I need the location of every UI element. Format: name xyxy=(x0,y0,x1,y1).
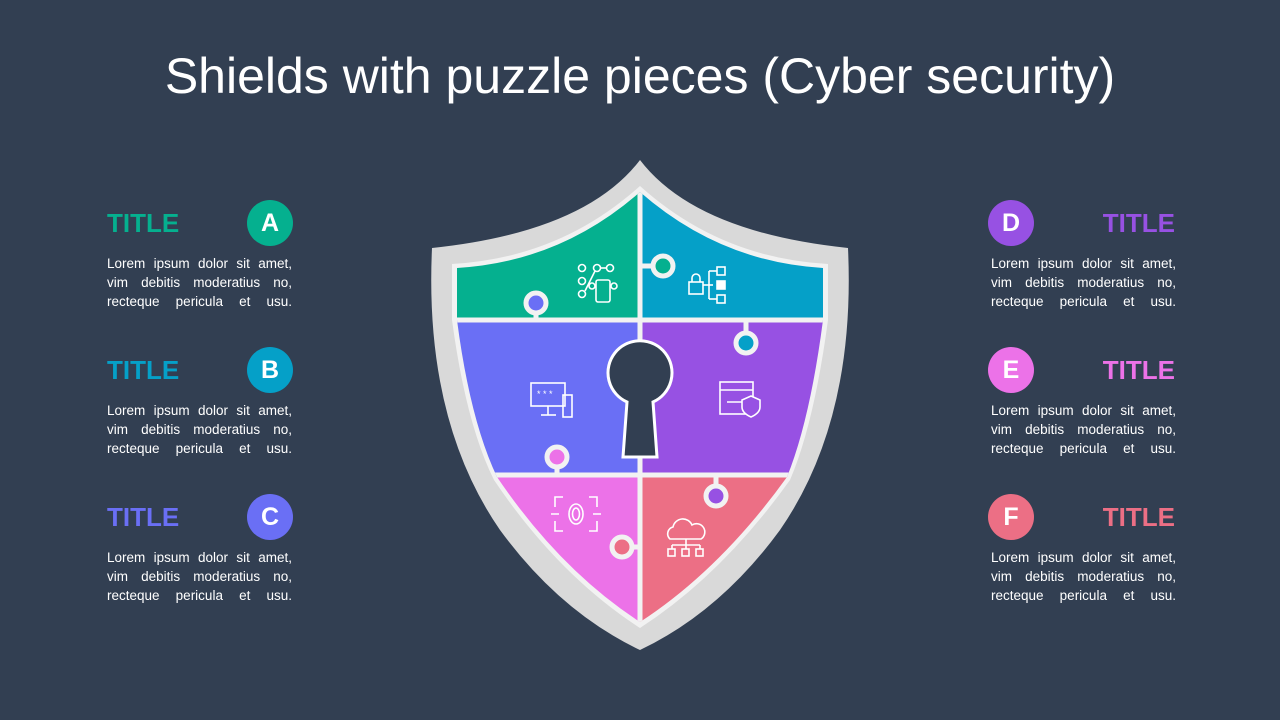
icon: network phone xyxy=(578,264,617,302)
block C: TITLE xyxy=(107,502,179,532)
block F: F xyxy=(1003,503,1019,531)
block B: Lorem ipsum dolor sit amet, vim debitis moderatius no, recteque pericula et usu. xyxy=(107,403,292,456)
block C xyxy=(107,494,293,603)
block F xyxy=(988,494,1176,603)
block A: Lorem ipsum dolor sit amet, vim debitis moderatius no, recteque pericula et usu. xyxy=(107,256,292,309)
shield xyxy=(431,160,849,650)
block D xyxy=(988,200,1176,309)
block E xyxy=(988,347,1176,456)
block D: Lorem ipsum dolor sit amet, vim debitis moderatius no, recteque pericula et usu. xyxy=(991,256,1176,309)
block C: Lorem ipsum dolor sit amet, vim debitis moderatius no, recteque pericula et usu. xyxy=(107,550,292,603)
block C: C xyxy=(261,503,279,531)
block A xyxy=(107,200,293,309)
block F: Lorem ipsum dolor sit amet, vim debitis moderatius no, recteque pericula et usu. xyxy=(991,550,1176,603)
block D: D xyxy=(1002,209,1020,237)
icon: lock hierarchy xyxy=(689,267,725,303)
block E: TITLE xyxy=(1103,355,1175,385)
keyhole xyxy=(608,341,672,457)
block B: B xyxy=(261,356,279,384)
block F: TITLE xyxy=(1103,502,1175,532)
block E: Lorem ipsum dolor sit amet, vim debitis moderatius no, recteque pericula et usu. xyxy=(991,403,1176,456)
icon: browser shield xyxy=(720,382,760,417)
block A: A xyxy=(261,209,279,237)
icon: password monitor: * * * xyxy=(537,389,553,399)
icon: cloud network xyxy=(668,519,705,556)
block D: TITLE xyxy=(1103,208,1175,238)
icon: fingerprint xyxy=(551,497,601,531)
block B: TITLE xyxy=(107,355,179,385)
block E: E xyxy=(1003,356,1019,384)
knobs xyxy=(526,256,756,557)
block A: TITLE xyxy=(107,208,179,238)
block B xyxy=(107,347,293,456)
title: Shields with puzzle pieces (Cyber security) xyxy=(165,48,1115,104)
icon: password monitor xyxy=(531,383,572,417)
